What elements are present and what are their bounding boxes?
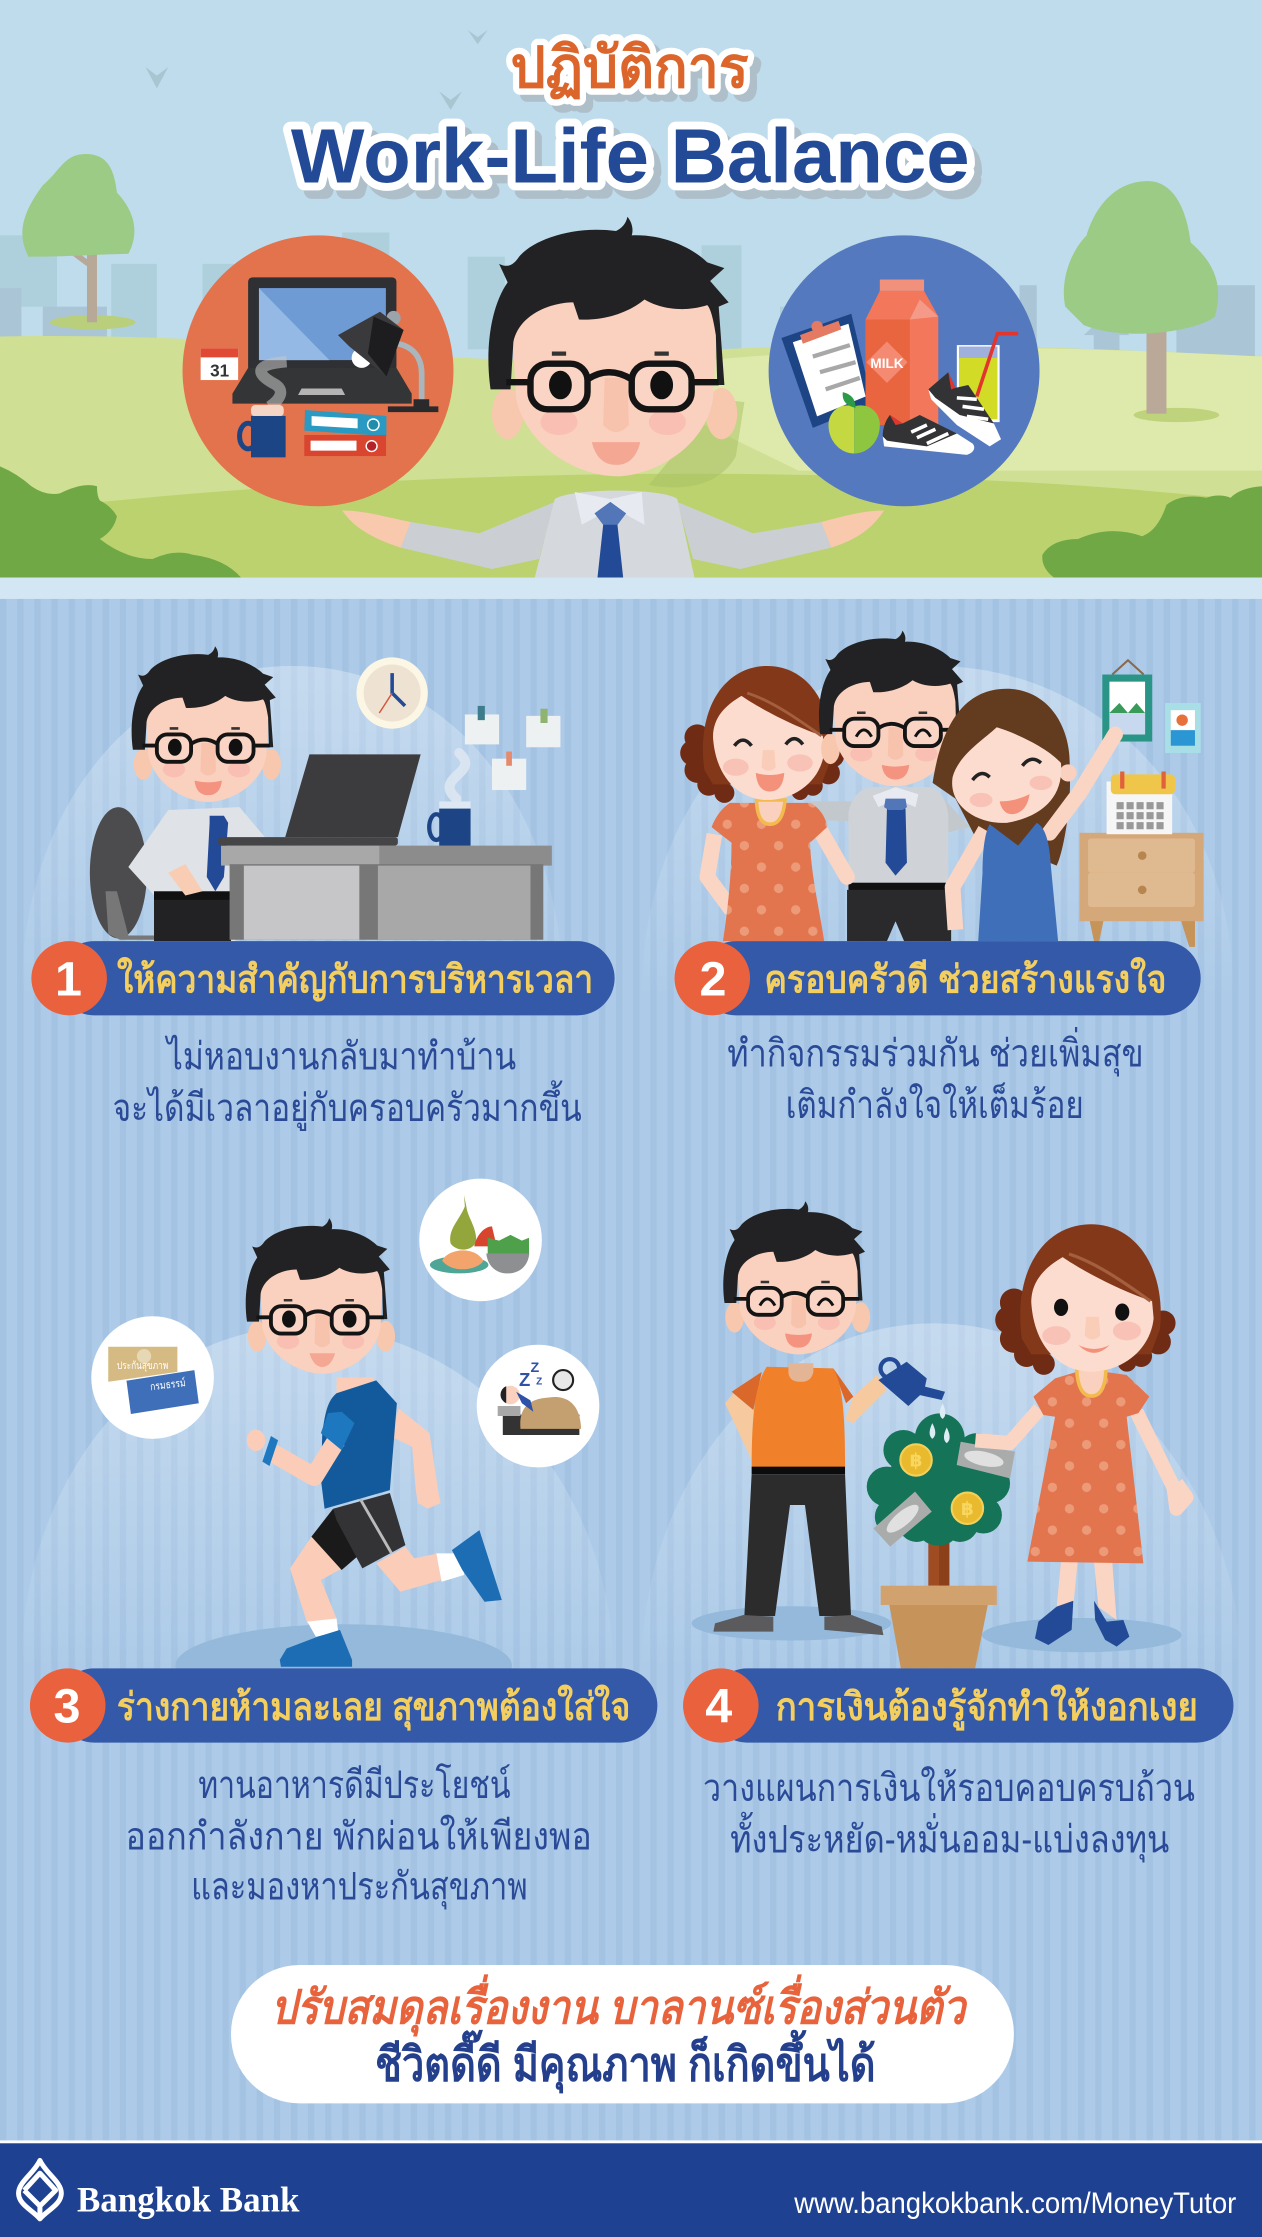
watering can — [878, 1359, 945, 1406]
cabinet — [1079, 833, 1204, 947]
calendar 31: 31 — [210, 361, 230, 380]
desk — [221, 846, 552, 940]
right circle: life items — [769, 235, 1040, 506]
mug — [429, 801, 471, 846]
title: Work-Life Balance: Work-Life Balance — [298, 122, 977, 208]
runner arm front — [247, 1412, 355, 1477]
calendar 31 — [201, 348, 238, 380]
laptop — [218, 754, 421, 846]
section 4 backdrop arc — [642, 1323, 1241, 1668]
hills — [0, 336, 1262, 578]
picture frame large — [1102, 660, 1152, 742]
head — [132, 646, 281, 802]
sticky notes — [465, 706, 560, 790]
description 3: ออกกำลังกาย พักผ่อนให้เพียงพอ — [125, 1815, 592, 1859]
woman left head — [680, 666, 844, 803]
title: ปฏิบัติการ: ปฏิบัติการ — [511, 36, 749, 100]
head — [488, 217, 737, 476]
description 2: ทำกิจกรรมร่วมกัน ช่วยเพิ่มสุข — [727, 1027, 1144, 1077]
background: striped body panel — [0, 599, 1262, 2142]
description 4: ทั้งประหยัด-หมั่นออม-แบ่งลงทุน — [730, 1811, 1169, 1862]
cleat front — [883, 415, 974, 455]
description 3: ทานอาหารดีมีประโยชน์ — [198, 1763, 511, 1807]
bubble: insurance cards — [91, 1316, 214, 1439]
cleat back — [928, 372, 1001, 446]
man head — [819, 631, 968, 786]
man head — [723, 1201, 870, 1354]
runner neck — [337, 1378, 374, 1405]
ribbon 1: ให้ความสำคัญกับการบริหารเวลา — [117, 957, 593, 1002]
picture frame small — [1165, 703, 1201, 753]
man in orange — [713, 1363, 887, 1635]
title: Work-Life Balance: Work-Life Balance — [291, 114, 970, 200]
mug — [240, 405, 286, 457]
bubble: insurance cards: ประกันสุขภาพ — [117, 1360, 168, 1372]
ribbon 2: 2 — [700, 952, 726, 1006]
bubble: food — [419, 1179, 542, 1301]
runner head — [246, 1218, 395, 1374]
office chair — [90, 807, 164, 940]
woman body — [975, 1369, 1149, 1647]
steam — [261, 362, 287, 407]
woman right head — [952, 727, 1077, 823]
section 2 backdrop arc — [642, 666, 1233, 998]
folders — [304, 410, 386, 456]
bank logo — [19, 2160, 61, 2219]
illustration 3: runner — [91, 1179, 599, 1707]
bubble: sleep: Z — [530, 1360, 539, 1376]
bubble: sleep: Z — [536, 1377, 542, 1388]
juice glass — [957, 334, 1018, 422]
ground shadow — [649, 399, 744, 487]
description 1: ไม่หอบงานกลับมาทำบ้าน — [164, 1035, 516, 1079]
man body — [847, 787, 951, 941]
desk calendar — [1107, 771, 1175, 834]
ribbon 3 — [30, 1668, 657, 1743]
left circle: work items — [183, 235, 453, 506]
clipboard — [781, 314, 873, 428]
apple — [828, 392, 880, 453]
milk carton — [866, 280, 938, 425]
bubble: insurance cards: กรมธรรม์ — [149, 1376, 186, 1393]
description 3 — [125, 1763, 592, 1909]
woman head — [995, 1224, 1176, 1375]
bubble: sleep: Z — [519, 1369, 530, 1390]
callout: ปรับสมดุลเรื่องงาน บาลานซ์เรื่องส่วนตัว — [271, 1974, 968, 2038]
bushes — [0, 466, 241, 578]
runner back arm — [392, 1408, 441, 1509]
illustration 1: man at desk — [90, 646, 560, 941]
ribbon 1 — [31, 941, 615, 1015]
woman right body — [953, 734, 1115, 941]
desk lamp — [338, 311, 438, 412]
money tree — [867, 1403, 1015, 1668]
header character — [342, 217, 884, 578]
man behind arm — [810, 796, 970, 834]
runner shorts — [311, 1493, 405, 1570]
birds — [145, 30, 488, 110]
woman right back hair — [933, 689, 1070, 866]
ribbon 4: การเงินต้องรู้จักทำให้งอกเงย — [776, 1684, 1198, 1731]
money tree: ฿ — [961, 1498, 974, 1519]
description 2 — [727, 1027, 1144, 1127]
milk carton: MILK — [870, 356, 904, 371]
tree left — [22, 154, 135, 329]
section 1 backdrop arc — [21, 666, 563, 998]
steam — [449, 753, 465, 799]
illustration 2: family — [680, 631, 1204, 947]
title: ปฏิบัติการ: ปฏิบัติการ — [518, 43, 756, 107]
website url: www.bangkokbank.com/MoneyTutor — [793, 2187, 1236, 2220]
section 3 backdrop arc — [21, 1326, 613, 1668]
runner legs — [280, 1530, 502, 1667]
ribbon 4 — [683, 1668, 1233, 1743]
header: park scene — [0, 0, 1262, 599]
woman left body — [707, 800, 847, 941]
callout — [231, 1965, 1014, 2103]
ribbon 2: ครอบครัวดี ช่วยสร้างแรงใจ — [764, 957, 1166, 1002]
description 1 — [113, 1035, 582, 1131]
description 3: และมองหาประกันสุขภาพ — [191, 1865, 528, 1909]
illustration 4: couple and money tree — [692, 1201, 1186, 1668]
ground shadows — [692, 1606, 1182, 1652]
description 1: จะได้มีเวลาอยู่กับครอบครัวมากขึ้น — [113, 1080, 582, 1131]
laptop — [232, 277, 412, 404]
ribbon 3: ร่างกายห้ามละเลย สุขภาพต้องใส่ใจ — [117, 1684, 630, 1731]
shirt and arms — [342, 491, 884, 578]
description 2: เติมกำลังใจให้เต็มร้อย — [786, 1081, 1084, 1127]
bubble: sleep — [477, 1345, 599, 1467]
ground shadow — [175, 1624, 512, 1707]
callout: ชีวิตดี๊ดี มีคุณภาพ ก็เกิดขึ้นได้ — [375, 2030, 876, 2094]
ribbon 4: 4 — [705, 1680, 732, 1734]
city skyline — [0, 232, 1255, 357]
man torso — [128, 807, 271, 941]
ribbon 1: 1 — [55, 952, 82, 1006]
footer — [0, 2140, 1262, 2237]
bank name: Bangkok Bank — [77, 2180, 300, 2220]
runner shirt — [321, 1380, 397, 1509]
woman right arm — [1137, 1412, 1186, 1509]
tree right — [1064, 181, 1219, 422]
description 4 — [703, 1766, 1195, 1862]
ribbon 3: 3 — [54, 1680, 81, 1734]
money tree: ฿ — [910, 1450, 923, 1471]
wall clock — [356, 657, 428, 729]
ribbon 2 — [674, 941, 1201, 1015]
